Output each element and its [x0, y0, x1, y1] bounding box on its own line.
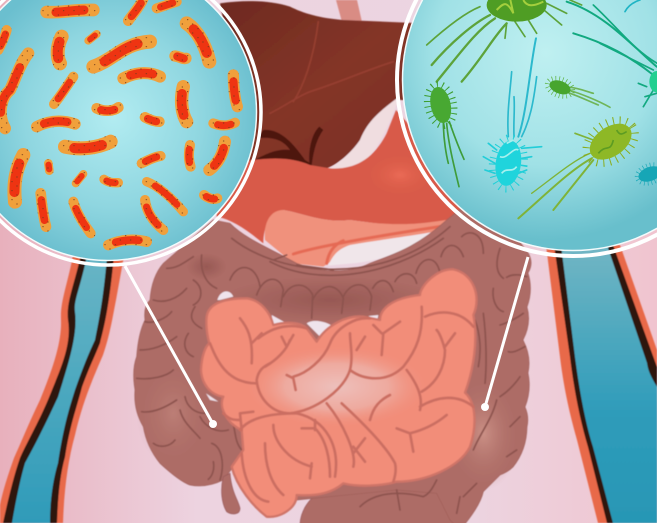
large intestine — [134, 207, 531, 523]
left magnifier circle: red rod bacteria — [0, 0, 261, 265]
left pointer line — [125, 266, 217, 428]
large green bacterium — [427, 0, 582, 82]
right arm — [546, 245, 657, 523]
appendix — [222, 473, 240, 514]
right magnifier circle: green and cyan bacteria — [397, 0, 657, 256]
gallbladder duct — [253, 127, 323, 166]
intestine fold lines — [210, 307, 473, 502]
yellow-green bacterium — [518, 112, 643, 218]
tiny green bacterium — [545, 75, 610, 107]
upper organs — [217, 1, 477, 267]
small intestine — [201, 269, 477, 517]
teal bacterium — [567, 0, 657, 107]
right pointer line — [481, 257, 528, 411]
small left green bacterium — [424, 82, 464, 187]
red rod bacteria — [0, 0, 237, 245]
pancreas — [265, 210, 477, 267]
white membrane — [328, 233, 430, 266]
blood vessel — [293, 222, 473, 263]
gaps between organs — [206, 291, 378, 402]
stomach — [217, 110, 477, 243]
liver — [220, 1, 423, 168]
small teal bacterium — [635, 161, 657, 187]
membrane — [328, 98, 398, 169]
cyan bacterium — [483, 38, 542, 191]
colon fold lines — [137, 227, 527, 513]
left arm — [0, 245, 126, 523]
esophagus — [336, 0, 362, 22]
